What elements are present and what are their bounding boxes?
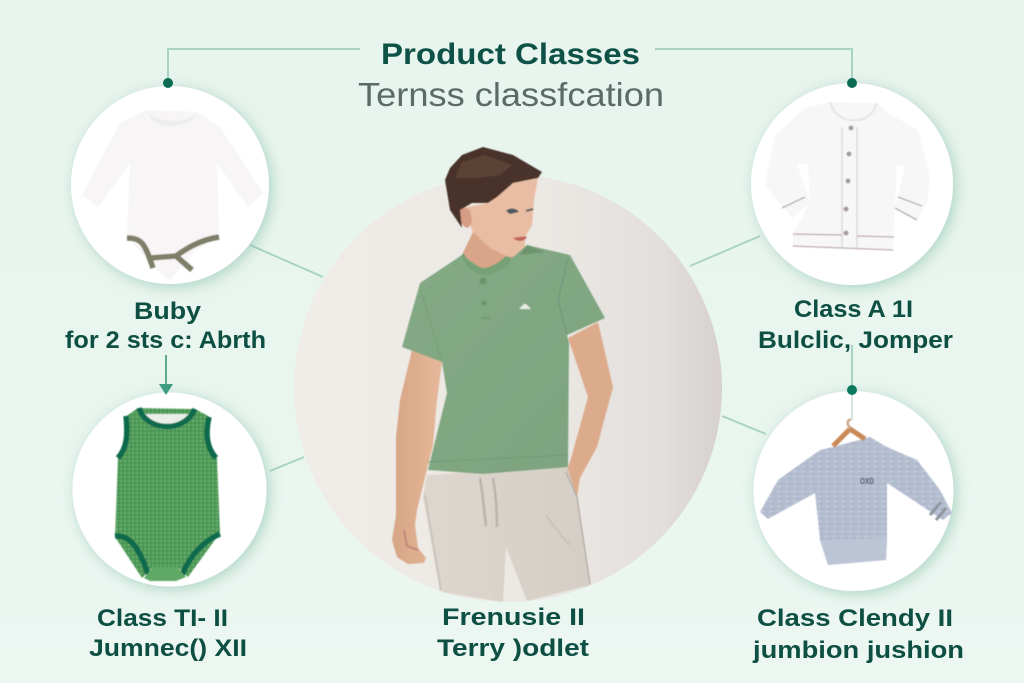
label: class TI-II (89, 605, 247, 662)
panel: baby long-sleeve bodysuit (71, 86, 269, 284)
dot: lower right (847, 385, 857, 395)
panel: green sleeveless bodysuit (72, 392, 266, 586)
dot: top left (163, 78, 173, 88)
label: class clendy: Class Clendy II (757, 605, 953, 632)
icon: white bodysuit (82, 110, 263, 280)
label: class TI-II: Jumnec() XII (89, 635, 247, 662)
icon: sweater on hanger: OXD (860, 477, 874, 486)
icon: cardigan (765, 102, 930, 250)
label: class clendy (752, 605, 964, 664)
label: centre model (437, 604, 589, 662)
label: baby: Buby (134, 298, 202, 325)
label: baby (65, 298, 266, 354)
panel: white cardigan (751, 83, 953, 285)
label: class TI-II: Class TI- II (97, 605, 228, 632)
model figure (392, 147, 613, 602)
arrow: down to green bodysuit (159, 384, 173, 395)
label: centre model: Terry )odlet (437, 635, 589, 662)
title: Product Classes (381, 38, 640, 71)
connector lines (166, 49, 852, 471)
icon: green bodysuit (115, 408, 220, 581)
panel: grey sweater (754, 391, 954, 591)
subtitle: Ternss classfcation (358, 76, 664, 113)
dot: top right (847, 78, 857, 88)
label: class A: Class A 1I (794, 296, 913, 323)
icon: sweater on hanger (760, 420, 952, 565)
label: baby: for 2 sts c: Abrth (65, 327, 266, 354)
label: class A: Bulclic, Jomper (758, 327, 953, 354)
label: class A (758, 296, 953, 354)
label: centre model: Frenusie II (442, 604, 585, 631)
label: class clendy: jumbion jushion (752, 637, 964, 664)
panel: central model (294, 147, 722, 602)
